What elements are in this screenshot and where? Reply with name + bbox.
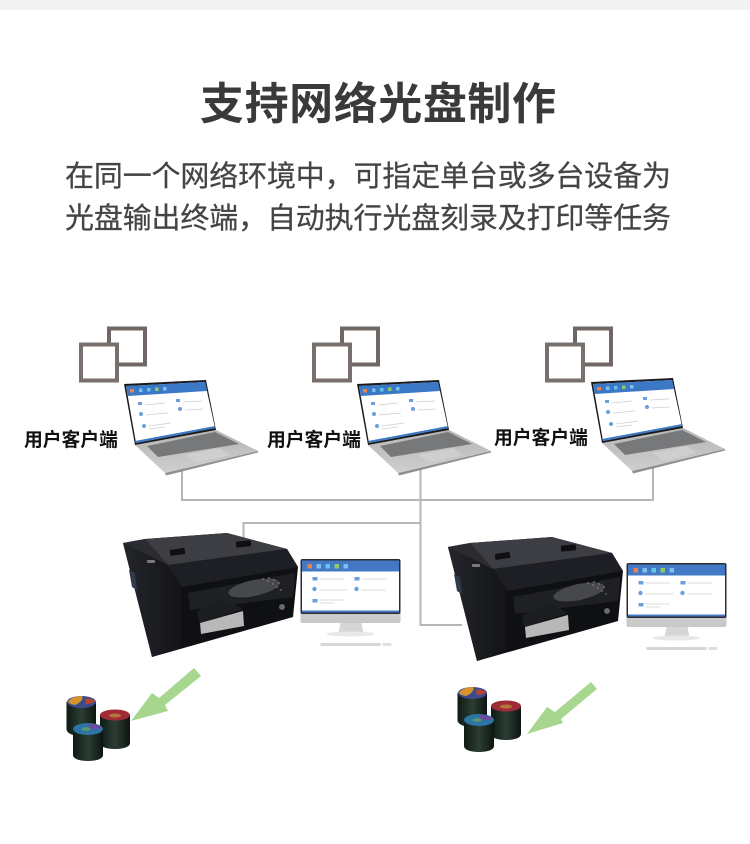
client 1 — [24, 328, 258, 476]
network connection lines — [182, 466, 653, 625]
client label 3: 用户客户端 — [494, 426, 588, 448]
client 2 — [267, 328, 491, 476]
title: 支持网络光盘制作 — [200, 80, 556, 129]
description text: 光盘输出终端，自动执行光盘刻录及打印等任务 — [65, 202, 671, 235]
laptop 3 — [591, 378, 725, 474]
disc stacks 1 — [66, 696, 130, 761]
client label 2: 用户客户端 — [267, 428, 361, 450]
client 3 — [494, 328, 725, 474]
icon: windows 2 — [314, 328, 378, 380]
arrow 2 — [527, 682, 597, 734]
icon: windows 3 — [547, 328, 611, 380]
disc stacks 2 — [458, 687, 521, 752]
monitor 1 — [300, 559, 400, 646]
laptop 2 — [357, 380, 491, 476]
icon: windows 1 — [81, 328, 145, 380]
monitor 2 — [626, 563, 726, 650]
disc publisher 2 — [448, 537, 623, 661]
description text — [65, 160, 671, 235]
station 1 — [66, 533, 400, 761]
client label 1: 用户客户端 — [24, 428, 118, 450]
laptop 1 — [124, 380, 258, 476]
top band — [0, 0, 750, 10]
disc publisher 1 — [123, 533, 298, 657]
station 2 — [448, 537, 726, 752]
arrow 1 — [131, 668, 201, 721]
description text: 在同一个网络环境中，可指定单台或多台设备为 — [65, 160, 671, 193]
